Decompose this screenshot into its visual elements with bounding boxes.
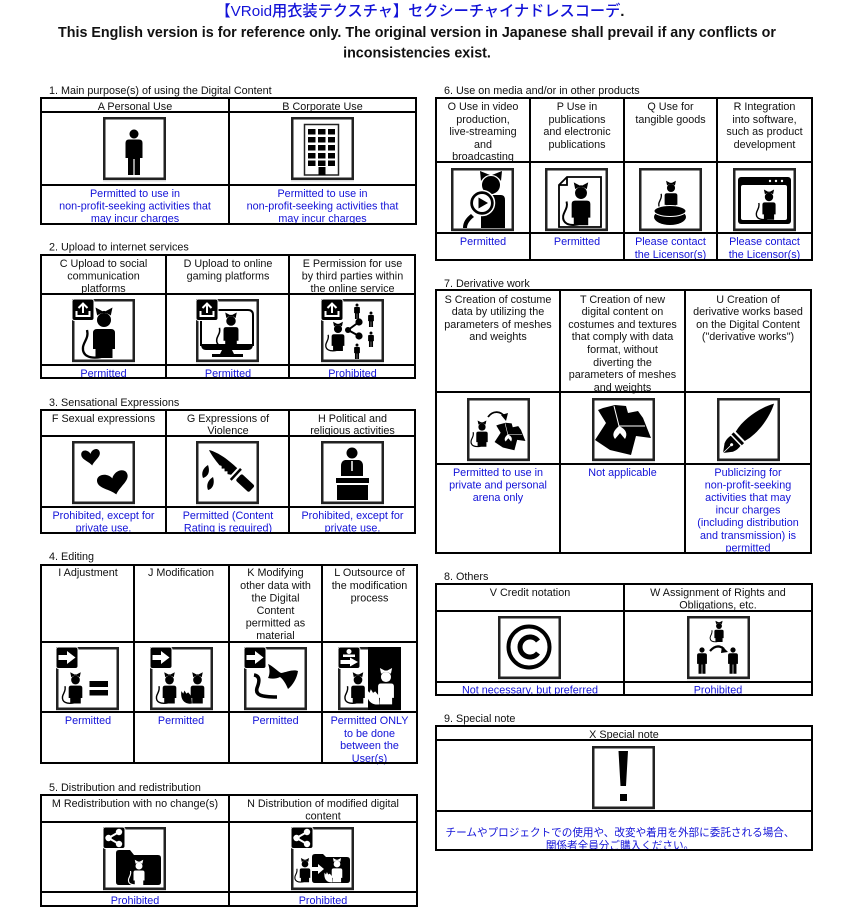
column headers: format, without — [587, 344, 658, 356]
column headers: the Digital — [251, 592, 300, 604]
icon: redistribution — [103, 827, 166, 892]
status text: Prohibited — [694, 684, 742, 696]
column headers: U Creation of — [716, 294, 781, 306]
status text: Permitted — [252, 715, 299, 727]
column headers: such as product — [726, 126, 803, 138]
column headers: diverting the — [593, 357, 652, 369]
special note text: チームやプロジェクトでの使用や、改変や着用を外部に委託される場合、 — [446, 826, 794, 839]
column headers: digital content on — [582, 306, 663, 318]
column headers: and weights — [469, 331, 527, 343]
column headers: other data with — [240, 580, 311, 592]
column headers: V Credit notation — [490, 587, 570, 599]
icon: person — [103, 118, 166, 182]
status text: User(s) — [352, 753, 387, 765]
status text: Not applicable — [588, 467, 657, 479]
status text: Not necessary, but preferred — [462, 684, 598, 696]
column headers: publications — [548, 139, 606, 151]
status text: Prohibited — [111, 895, 159, 907]
icon: costume data — [467, 399, 530, 462]
column headers: parameters of meshes — [444, 319, 552, 331]
column headers: W Assignment of Rights and — [650, 587, 786, 599]
English disclaimer: This English version is for reference only. The original version in Japanese shall prevail if any conflicts or — [58, 25, 776, 41]
column headers: gaming platforms — [187, 270, 270, 282]
panel: 5 distribution — [41, 782, 417, 907]
status text: the Licensor(s) — [729, 249, 800, 261]
column headers: H Political and — [318, 413, 387, 425]
icon: copyright — [498, 617, 561, 680]
column headers: platforms — [81, 283, 126, 295]
icon: modified distribution — [291, 827, 354, 892]
column headers: Content — [257, 605, 294, 617]
column headers: O Use in video — [448, 101, 518, 113]
icon: pen nib — [717, 398, 780, 462]
status text: Please contact — [635, 236, 706, 248]
status text: Prohibited — [328, 368, 377, 380]
English disclaimer: inconsistencies exist. — [343, 46, 491, 62]
status text: Publicizing for — [714, 467, 782, 479]
column headers: costumes and textures — [568, 319, 677, 331]
column headers: T Creation of new — [580, 294, 665, 306]
column headers: F Sexual expressions — [52, 413, 156, 425]
status text: non-profit-seeking — [705, 480, 791, 492]
column headers: ("derivative works") — [702, 331, 794, 343]
icon: publication — [545, 169, 608, 232]
icon: upload cat — [72, 299, 135, 364]
column headers: and weights — [594, 382, 652, 394]
icon: material — [244, 647, 307, 712]
column headers: by third parties within — [302, 270, 403, 282]
heading 6: 6. Use on media and/or in other products — [444, 85, 640, 97]
status text: Prohibited — [299, 895, 347, 907]
column headers: religious activities — [310, 425, 395, 437]
heading 8: 8. Others — [444, 571, 489, 583]
panel: 1 main purpose — [41, 85, 416, 225]
status text: and transmission) is — [700, 530, 797, 542]
icon: building — [291, 118, 354, 182]
status text: Prohibited, except for — [52, 510, 155, 522]
status text: Please contact — [729, 236, 800, 248]
status text: private use. — [325, 522, 380, 534]
panel: 4 editing — [41, 551, 417, 765]
column headers: tangible goods — [635, 114, 706, 126]
column headers: S Creation of costume — [445, 294, 551, 306]
status text: Permitted — [460, 236, 506, 248]
column headers: broadcasting — [452, 151, 514, 163]
panel: 2 upload to internet services — [41, 242, 415, 380]
heading 5: 5. Distribution and redistribution — [49, 782, 201, 794]
heading 3: 3. Sensational Expressions — [49, 397, 180, 409]
icon: exclamation — [592, 747, 655, 810]
column headers: A Personal Use — [98, 101, 172, 113]
column headers: the modification — [332, 580, 407, 592]
column headers: Violence — [207, 425, 249, 437]
panel: 6 use on media — [436, 85, 812, 261]
status text: Permitted — [158, 715, 204, 727]
Japanese title: 【VRoid用衣装テクスチャ】セクシーチャイナドレスコーデ. — [215, 2, 625, 20]
status text: Permitted (Content — [183, 510, 273, 522]
heading 7: 7. Derivative work — [444, 278, 530, 290]
column headers: content — [305, 810, 341, 822]
column headers: that comply with data — [572, 331, 673, 343]
column headers: Obligations, etc. — [679, 600, 757, 612]
column headers: communication — [67, 270, 140, 282]
column headers: P Use in — [557, 101, 597, 113]
status text: may incur charges — [91, 213, 180, 225]
heading 9: 9. Special note — [444, 713, 515, 725]
column headers: E Permission for use — [303, 258, 402, 270]
column headers: and electronic — [543, 126, 611, 138]
status text: the Licensor(s) — [635, 249, 706, 261]
column headers: G Expressions of — [187, 413, 270, 425]
status text: incur charges — [716, 504, 781, 516]
status text: (including distribution — [697, 517, 799, 529]
column headers: and — [474, 139, 492, 151]
column headers: production, — [456, 114, 510, 126]
status text: Rating is required) — [184, 522, 272, 534]
icon: video — [451, 169, 514, 232]
title — [58, 2, 776, 62]
status text: activities that may — [705, 492, 792, 504]
column headers: M Redistribution with no change(s) — [52, 798, 218, 810]
status text: to be done — [344, 728, 395, 740]
column headers: into software, — [732, 114, 797, 126]
status text: Permitted — [80, 368, 127, 380]
icon: assignment of rights — [687, 617, 750, 680]
status text: private use. — [76, 522, 131, 534]
column headers: B Corporate Use — [282, 101, 363, 113]
column headers: data by utilizing the — [452, 306, 544, 318]
status text: permitted — [725, 542, 771, 554]
panel: 9 special note — [436, 713, 812, 852]
icon: adjustment — [56, 647, 119, 712]
icon: hearts — [72, 442, 135, 506]
column headers: the online service — [310, 283, 395, 295]
heading 2: 2. Upload to internet services — [49, 242, 189, 254]
status text: Permitted to use in — [277, 188, 368, 200]
status text: between the — [340, 740, 399, 752]
column headers: C Upload to social — [60, 258, 147, 270]
column headers: L Outsource of — [334, 567, 406, 579]
icon: knife — [196, 442, 259, 506]
heading 4: 4. Editing — [49, 551, 94, 563]
column headers: Q Use for — [647, 101, 694, 113]
panel: 7 derivative work — [436, 278, 811, 554]
panel: 3 sensational expressions — [41, 397, 415, 534]
icon: upload to gaming monitor — [196, 299, 259, 364]
column headers: on the Digital Content — [696, 319, 800, 331]
icon: third party sharing — [321, 299, 384, 364]
heading 1: 1. Main purpose(s) of using the Digital Content — [49, 85, 272, 97]
column headers: material — [256, 630, 295, 642]
column headers: D Upload to online — [184, 258, 272, 270]
status text: may incur charges — [278, 213, 367, 225]
column headers: development — [734, 139, 795, 151]
status text: arena only — [473, 492, 524, 504]
column headers: process — [351, 592, 389, 604]
status text: Permitted — [65, 715, 111, 727]
status text: Prohibited, except for — [301, 510, 404, 522]
column headers: permitted as — [246, 618, 306, 630]
icon: podium speaker — [321, 442, 384, 506]
panel: 8 others — [436, 571, 812, 696]
status text: non-profit-seeking activities that — [59, 200, 211, 212]
status text: Permitted to use in — [453, 467, 543, 479]
column headers: live-streaming — [449, 126, 517, 138]
status text: Permitted — [205, 368, 251, 380]
column headers: R Integration — [734, 101, 795, 113]
icon: outsource — [338, 647, 401, 712]
column headers: I Adjustment — [58, 567, 118, 579]
icon: software window — [733, 169, 796, 232]
column headers: parameters of meshes — [569, 369, 677, 381]
icon: turntable — [639, 169, 702, 232]
status text: Permitted ONLY — [331, 715, 408, 727]
status text: Permitted — [554, 236, 600, 248]
column headers: publications — [548, 114, 606, 126]
status text: non-profit-seeking activities that — [247, 200, 398, 212]
icon: modification — [150, 647, 213, 712]
column headers: J Modification — [148, 567, 214, 579]
column headers: N Distribution of modified digital — [247, 798, 399, 810]
column headers: derivative works based — [693, 306, 803, 318]
status text: private and personal — [449, 480, 547, 492]
special note text: 関係者全員分ご購入ください。 — [546, 839, 694, 852]
column header: X Special note — [589, 729, 659, 741]
column headers: K Modifying — [247, 567, 304, 579]
status text: Permitted to use in — [90, 188, 180, 200]
icon: dress — [592, 399, 655, 462]
